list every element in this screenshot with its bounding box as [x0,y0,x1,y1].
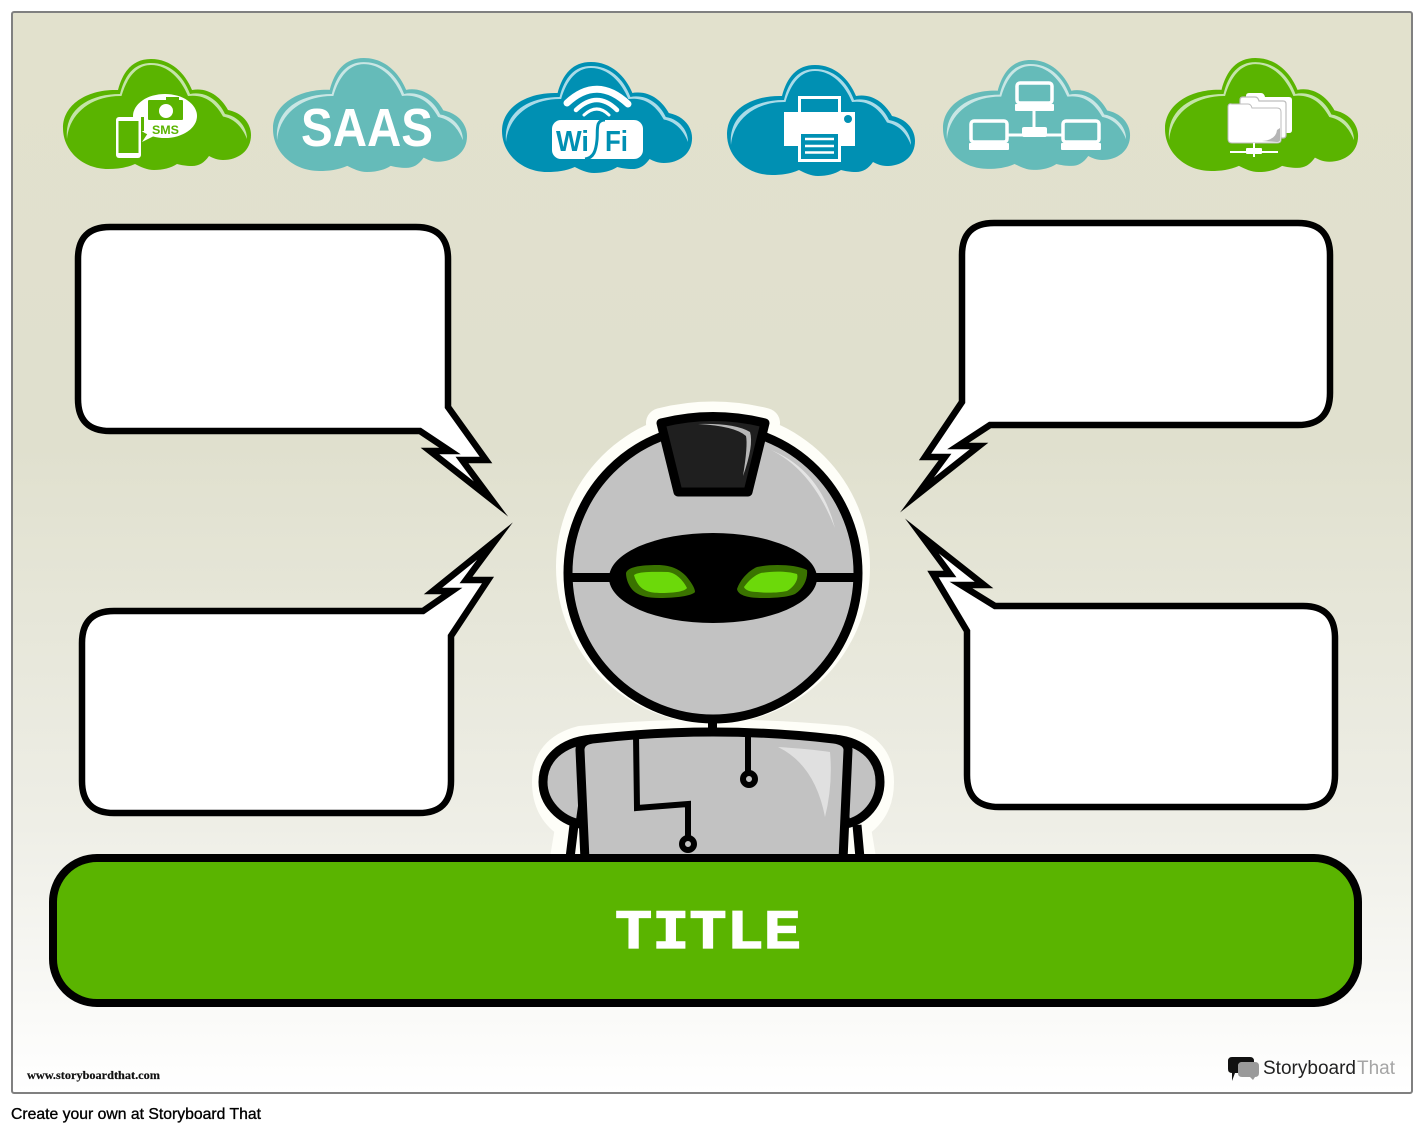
robot torso [580,732,848,860]
robot head [568,427,858,719]
title text: TITLE [615,901,801,965]
storyboard that logo: Storyboard [1263,1058,1356,1079]
visor [609,533,817,623]
head band [568,573,858,582]
speech bubble: bottom right [922,536,1335,807]
torso highlight [778,747,831,817]
right eye [737,565,807,598]
speech bubble: top right [917,223,1330,495]
left eye [626,565,695,598]
cloud icon: SMS [63,59,251,170]
left eye glow [634,572,687,593]
torso circuit lines [636,736,755,850]
title banner [53,858,1358,1003]
footer caption: Create your own at Storyboard That [11,1106,262,1123]
head highlight [771,450,835,528]
cloud icon: shared folders [1165,58,1358,172]
cloud icon: WiFi [502,62,692,173]
robot arms [543,739,880,858]
cloud icon: SAAS [273,58,467,172]
cloud icon: SMS: SMS [152,123,179,137]
robot hat [661,416,765,492]
cloud icon: WiFi: Fi [605,126,628,158]
speech bubble: top left [78,227,491,499]
cloud icon: WiFi: Wi [556,126,589,158]
storyboard that logo [1228,1057,1396,1081]
robot halo [541,410,885,858]
robot neck [708,715,717,737]
speech bubble: bottom left [82,541,495,813]
right eye glow [744,572,797,593]
storyboard that logo: That [1357,1058,1396,1079]
website text: www.storyboardthat.com [27,1068,160,1082]
cloud icon: SAAS: SAAS [301,98,433,158]
cloud icon: printer [727,65,915,176]
hat highlight [698,424,751,476]
robot character [541,410,885,860]
cloud icon: network [943,60,1130,170]
